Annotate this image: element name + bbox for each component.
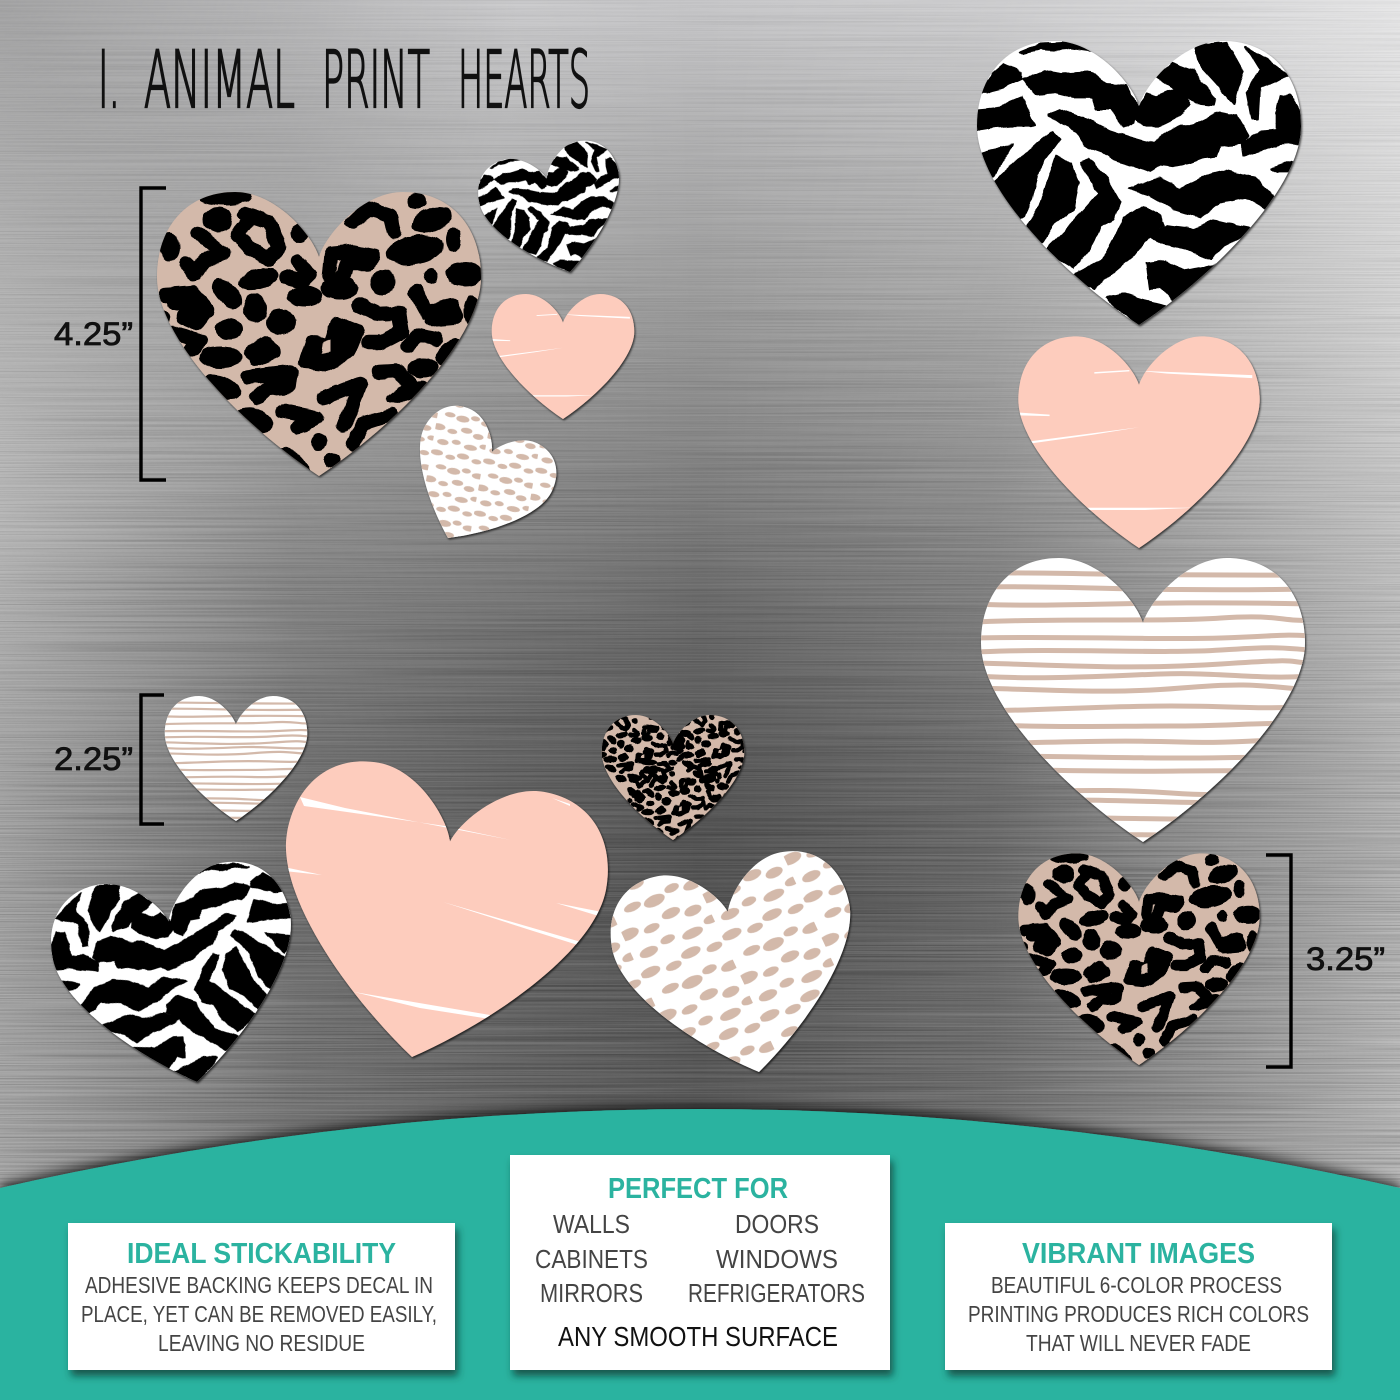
text: printing description: THAT WILL NEVER FADE bbox=[1026, 1330, 1251, 1356]
heart: small leopard bbox=[602, 715, 746, 842]
text: adhesive description: PLACE, YET CAN BE REMOVED EASILY, bbox=[81, 1301, 437, 1327]
text: surface list: MIRRORS bbox=[540, 1278, 643, 1308]
size bracket 2.25 in: 2.25” bbox=[54, 741, 133, 777]
heart: small stripes bbox=[163, 696, 310, 821]
size bracket 2.25 in bbox=[54, 695, 164, 824]
panel: perfect for bbox=[510, 1155, 890, 1370]
heart: large stripes bbox=[976, 558, 1311, 842]
text: adhesive description: ADHESIVE BACKING KEEPS DECAL IN bbox=[85, 1272, 433, 1298]
text: surface list: WINDOWS bbox=[716, 1244, 838, 1274]
teal footer arc bbox=[0, 1109, 1400, 1400]
panel: ideal stickability bbox=[68, 1223, 455, 1370]
title: PRINT bbox=[322, 36, 430, 126]
size bracket 4.25 in: 4.25” bbox=[54, 316, 133, 352]
title: I. bbox=[98, 36, 120, 126]
text: surface list: WALLS bbox=[553, 1209, 630, 1239]
text: printing description: BEAUTIFUL 6-COLOR PROCESS bbox=[991, 1272, 1282, 1298]
title bbox=[98, 36, 590, 126]
size bracket 3.25 in bbox=[1266, 855, 1385, 1067]
text: surface list: CABINETS bbox=[535, 1244, 648, 1274]
heart: small dots bbox=[384, 394, 568, 570]
text: surface list: DOORS bbox=[735, 1209, 819, 1239]
size bracket 4.25 in bbox=[54, 188, 166, 480]
text: surface list bbox=[535, 1209, 865, 1308]
text: any smooth surface: ANY SMOOTH SURFACE bbox=[558, 1321, 838, 1352]
text: printing description bbox=[968, 1272, 1309, 1356]
text: surface list: REFRIGERATORS bbox=[688, 1278, 865, 1308]
heart: small pink bbox=[491, 294, 634, 419]
heading: ideal stickability: IDEAL STICKABILITY bbox=[127, 1238, 396, 1270]
heading: vibrant images: VIBRANT IMAGES bbox=[1022, 1238, 1255, 1270]
text: HEARTS bbox=[458, 36, 590, 126]
heart: medium zebra bbox=[50, 862, 294, 1084]
size bracket 3.25 in: 3.25” bbox=[1306, 941, 1385, 977]
heart: large zebra bbox=[973, 41, 1303, 327]
title: ANIMAL bbox=[144, 36, 295, 126]
heart: large leopard bbox=[156, 188, 483, 480]
text: adhesive description: LEAVING NO RESIDUE bbox=[158, 1330, 365, 1356]
text: printing description: PRINTING PRODUCES RICH COLORS bbox=[968, 1301, 1309, 1327]
heart: medium dots bbox=[600, 841, 877, 1095]
heart: large pink with scratches bbox=[286, 761, 610, 1060]
panel: vibrant images bbox=[945, 1223, 1332, 1370]
heart: small zebra bbox=[478, 140, 622, 274]
text: adhesive description bbox=[81, 1272, 437, 1356]
heart: medium pink bbox=[1017, 336, 1260, 548]
heading: perfect for: PERFECT FOR bbox=[608, 1173, 788, 1205]
heart: medium leopard bbox=[1018, 850, 1261, 1068]
